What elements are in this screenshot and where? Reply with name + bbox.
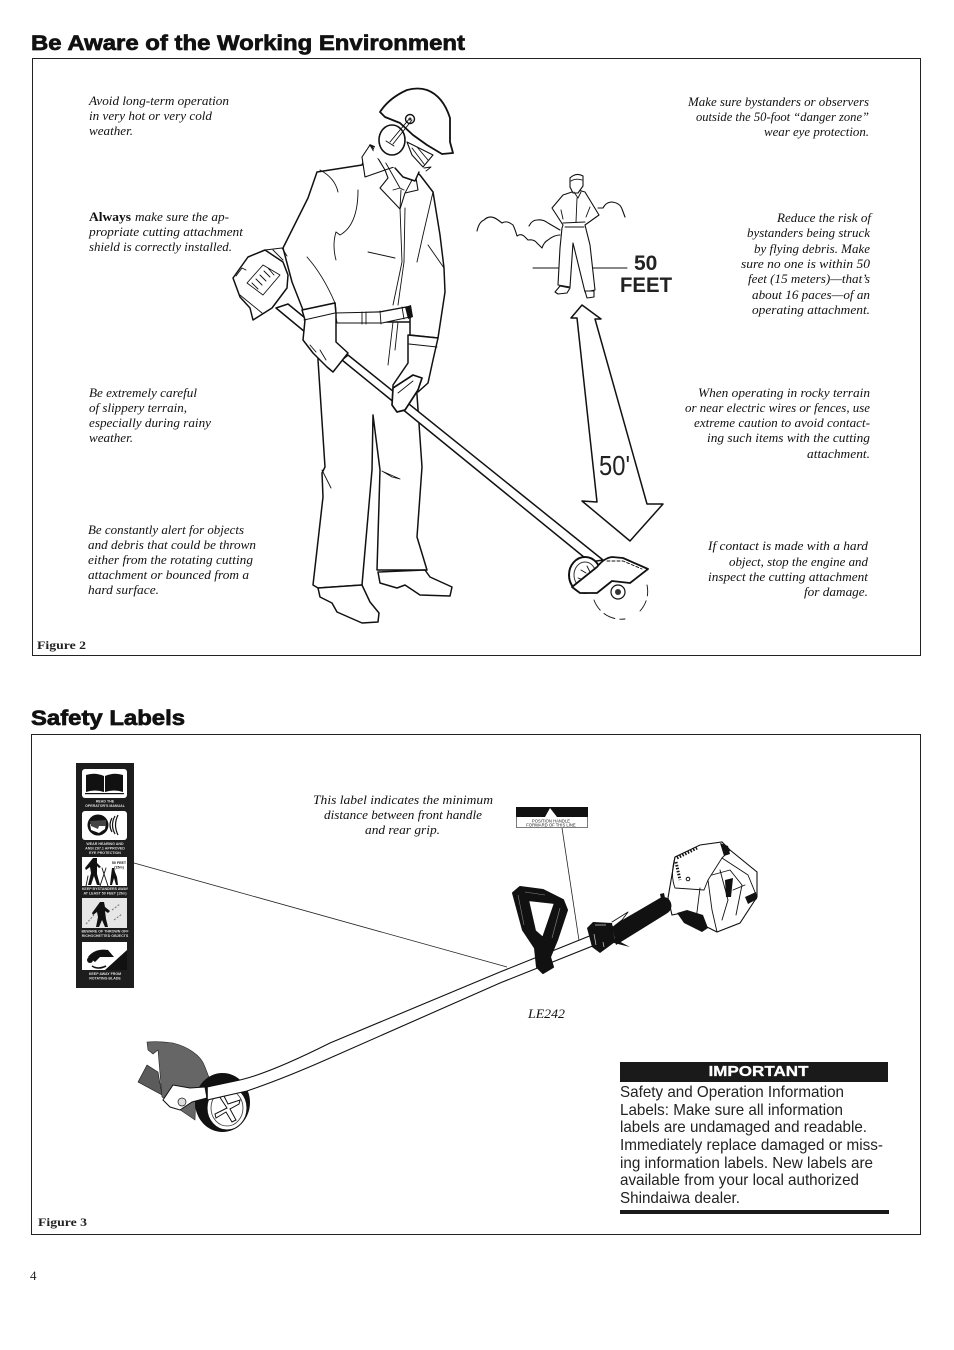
text: hard object note — [707, 539, 869, 599]
text: shield note — [88, 210, 244, 254]
text: label position note: and rear grip. — [365, 823, 440, 837]
text: flying debris note: about 16 paces—of an — [752, 288, 870, 302]
text: slippery terrain note: especially during rainy — [89, 416, 211, 430]
goggles — [407, 142, 433, 167]
illustration: operator with edger — [233, 88, 648, 623]
text: flying debris note: by flying debris. Make — [754, 242, 870, 256]
text: hard object note: object, stop the engine and — [729, 555, 869, 569]
throttle housing — [587, 922, 615, 953]
helmet — [380, 88, 453, 154]
handle position label: POSITION HANDLE — [532, 818, 570, 824]
handle position label — [516, 807, 588, 828]
decal text: protection: EYE PROTECTION — [89, 851, 121, 855]
icon: rotating blade — [82, 942, 127, 970]
caption: figure 2: Figure 2 — [37, 638, 86, 652]
front handle — [513, 887, 567, 973]
callout: important: Immediately replace damaged or miss- — [620, 1137, 883, 1154]
icon: thrown objects — [82, 898, 127, 928]
collar — [362, 145, 385, 177]
edger guard — [138, 1065, 162, 1095]
text: flying debris note: bystanders being struck — [747, 226, 870, 240]
text: rocky terrain note: ing such items with the cutting — [707, 431, 870, 445]
illustration: bystander with clouds — [477, 174, 627, 298]
heading: safety labels: Safety Labels — [31, 707, 185, 730]
text: shield note: propriate cutting attachment — [88, 225, 244, 239]
illustration: edger machine — [138, 842, 757, 1132]
callout: important: Safety and Operation Information — [620, 1084, 844, 1101]
leader lines — [134, 828, 580, 967]
text: debris note: and debris that could be thrown — [88, 538, 256, 552]
text: shield note: Always — [89, 210, 131, 224]
caption: figure 3: Figure 3 — [38, 1215, 87, 1229]
text: hot weather note: in very hot or very cold — [89, 109, 213, 123]
tyre — [195, 1073, 250, 1132]
callout: important — [620, 1062, 889, 1214]
decal text: protection: ANSI Z87.1 APPROVED — [85, 846, 125, 850]
text: hot weather note: Avoid long-term operation — [88, 94, 229, 108]
callout: important: Shindaiwa dealer. — [620, 1190, 740, 1207]
text: debris note: either from the rotating cutting — [88, 553, 253, 567]
callout: important: ing information labels. New labels are — [620, 1155, 873, 1172]
heading: working environment: Be Aware of the Working Environment — [31, 32, 465, 55]
decal text: blade — [89, 972, 121, 980]
text: shield note: shield is correctly installed. — [89, 240, 232, 254]
panel: working environment — [32, 58, 920, 656]
icon: keep bystanders away — [82, 857, 127, 886]
pants — [313, 322, 427, 588]
text: slippery terrain note: weather. — [89, 431, 133, 445]
text: debris note: attachment or bounced from a — [88, 568, 249, 582]
icon: keep bystanders away: 50 FEET — [112, 861, 127, 865]
grip — [612, 897, 671, 945]
rear shaft — [276, 304, 310, 332]
left cuff and glove — [302, 303, 348, 372]
text: flying debris note: operating attachment. — [752, 303, 870, 317]
text: flying debris note: Reduce the risk of — [776, 211, 873, 225]
text: label position note: This label indicates the minimum — [313, 793, 493, 807]
horizon — [533, 267, 627, 269]
tube — [207, 935, 595, 1100]
text: bystanders note: outside the 50-foot “danger zone” — [696, 110, 869, 124]
left shoe — [318, 585, 379, 623]
text: flying debris note: sure no one is within 50 — [741, 257, 871, 271]
safety decal — [76, 763, 134, 988]
text: rocky terrain note: attachment. — [807, 447, 870, 461]
edger head — [569, 557, 601, 593]
head and face — [372, 118, 432, 181]
decal text: read manual: OPERATOR'S MANUAL — [85, 804, 126, 808]
callout: important: IMPORTANT — [708, 1063, 808, 1080]
front handle — [392, 375, 422, 412]
text: bystanders note — [687, 95, 869, 139]
icon: eye and ear protection — [82, 811, 127, 840]
clouds — [477, 202, 625, 248]
earmuff — [379, 125, 405, 155]
text: bystanders note: wear eye protection. — [764, 125, 869, 139]
belt — [335, 307, 410, 323]
text: rocky terrain note: extreme caution to avoid contact- — [694, 416, 870, 430]
text: slippery terrain note: Be extremely careful — [89, 386, 198, 400]
torso — [283, 145, 445, 338]
text: hard object note: If contact is made with a hard — [707, 539, 869, 553]
text: label position note — [313, 793, 493, 837]
label: 50 feet: 50 — [634, 252, 657, 275]
panel: safety labels — [32, 734, 920, 1234]
person — [552, 190, 599, 292]
decal text: read manual — [85, 800, 126, 808]
label: 50 feet — [620, 252, 672, 297]
text: debris note — [88, 523, 256, 597]
icon: manual — [82, 769, 127, 798]
text: debris note: Be constantly alert for objects — [88, 523, 244, 537]
page number: 4 — [30, 1268, 37, 1283]
icon: keep bystanders away: (15m) — [114, 866, 125, 870]
decal text: keep away — [82, 887, 129, 896]
handle position label: FORWARD OF THIS LINE — [526, 822, 576, 828]
decal text: blade: ROTATING BLADE — [89, 976, 121, 980]
text: flying debris note — [741, 211, 873, 317]
text: bystanders note: Make sure bystanders or observers — [687, 95, 869, 109]
decal text: blade: KEEP AWAY FROM — [89, 972, 121, 976]
callout: important: available from your local authorized — [620, 1172, 859, 1189]
text: rocky terrain note: When operating in rocky terrain — [698, 386, 870, 400]
text: hot weather note — [88, 94, 229, 138]
gearbox — [163, 1085, 207, 1110]
text: hard object note: inspect the cutting attachment — [708, 570, 869, 584]
right glove — [393, 335, 438, 392]
text: shield note: make sure the ap- — [135, 210, 229, 224]
text: slippery terrain note: of slippery terrain, — [89, 401, 187, 415]
decal text: thrown objects: BEWARE OF THROWN OFF — [81, 930, 129, 934]
callout: important: Labels: Make sure all information — [620, 1102, 843, 1119]
text: hard object note: for damage. — [804, 585, 868, 599]
engine housing — [668, 842, 757, 932]
shirt folds — [307, 170, 444, 305]
text: rocky terrain note — [685, 386, 870, 461]
arrow: 50 foot distance: 50' — [599, 450, 630, 481]
text: hot weather note: weather. — [89, 124, 133, 138]
decal text: keep away: AT LEAST 50 FEET (15m) — [83, 892, 127, 896]
text: label position note: distance between front handle — [324, 808, 482, 822]
decal text: protection: WEAR HEARING AND — [86, 842, 124, 846]
text: slippery terrain note — [89, 386, 211, 445]
callout: important: labels are undamaged and readable. — [620, 1119, 867, 1136]
engine unit — [233, 250, 288, 320]
decal text: protection — [85, 842, 125, 855]
decal text: read manual: READ THE — [96, 800, 115, 804]
label: 50 feet: FEET — [620, 274, 672, 297]
decal text: thrown objects: RICHOCHETTED OBJECTS — [82, 934, 129, 938]
decal text: keep away: KEEP BYSTANDERS AWAY — [82, 887, 129, 891]
text: debris note: hard surface. — [88, 583, 159, 597]
arrow: 50 foot distance — [571, 305, 663, 541]
right shoe — [378, 570, 452, 596]
black foot — [677, 910, 708, 932]
main shaft — [342, 355, 603, 562]
text: rocky terrain note: or near electric wires or fences, use — [685, 401, 870, 415]
decal text: thrown objects — [81, 930, 129, 938]
text: flying debris note: feet (15 meters)—that’s — [748, 272, 870, 286]
text: model number: LE242 — [527, 1007, 565, 1021]
